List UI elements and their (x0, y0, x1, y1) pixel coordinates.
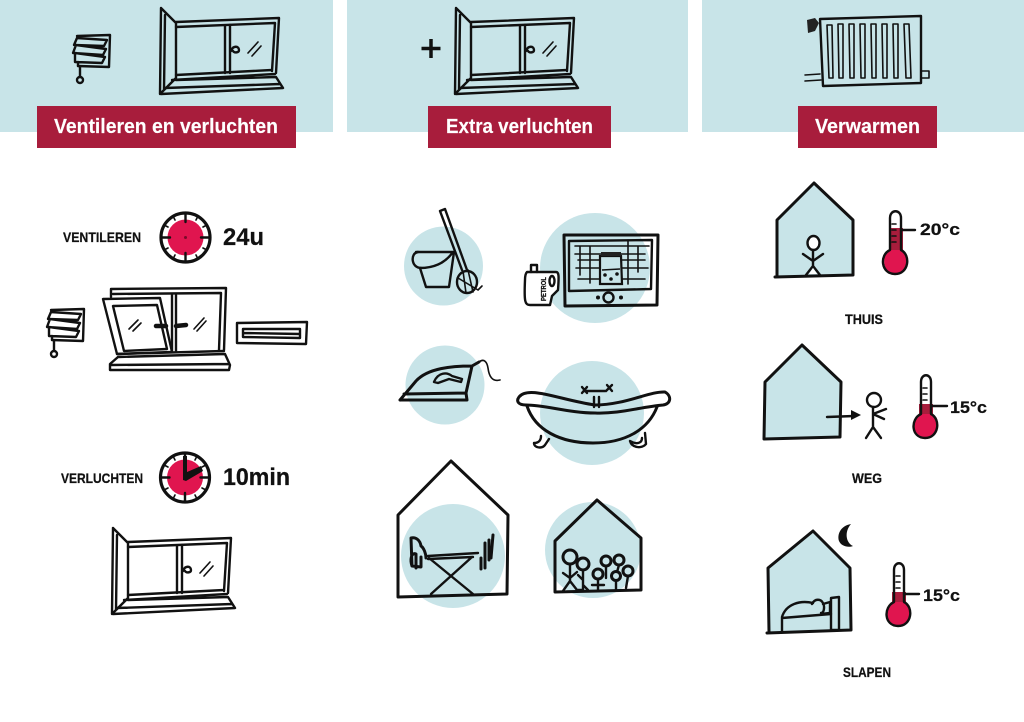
icon: plus sign (422, 39, 440, 58)
icon: thermometer 15 degrees (887, 563, 919, 626)
block: thuis (775, 183, 960, 327)
heading: verwarmen: Verwarmen (815, 116, 920, 138)
panel: ventileren en verluchten header (0, 0, 333, 148)
label: verluchten: VERLUCHTEN (61, 470, 143, 486)
icon: wall vent (73, 35, 110, 83)
value: 15 degrees: 15°c (950, 398, 987, 417)
label: weg: WEG (852, 470, 882, 486)
icon: house with person (775, 183, 853, 277)
heading: extra verluchten (428, 106, 611, 148)
value: 10min: 10min (223, 464, 290, 491)
heading: ventileren en verluchten: Ventileren en verluchten (54, 116, 278, 138)
label: slapen: SLAPEN (843, 664, 891, 680)
heading: verwarmen (798, 106, 937, 148)
block: verluchten 10 minuten (61, 453, 290, 502)
illustration: plants in house (545, 500, 641, 598)
illustration: bathtub (518, 361, 670, 465)
icon: tilted open window (103, 288, 230, 370)
heading: extra verluchten: Extra verluchten (446, 116, 593, 138)
value: 20 degrees: 20°c (920, 220, 960, 239)
block: weg (764, 345, 987, 486)
block: ventileren 24 uur (63, 213, 264, 262)
icon: house with person leaving (764, 345, 886, 439)
illustration: drying rack in house (398, 461, 508, 608)
icon: open window (455, 8, 578, 94)
petrol can: PETROL (539, 277, 548, 301)
icon: open window (160, 8, 283, 94)
icon: open window (112, 528, 235, 614)
label: ventileren: VENTILEREN (63, 229, 141, 245)
icon: thermometer 20 degrees (883, 211, 915, 274)
icon: wall vent (47, 309, 84, 357)
icon: clock full red (161, 213, 210, 262)
panel: verwarmen header (702, 0, 1024, 148)
icon: radiator (805, 16, 929, 86)
value: 15 degrees: 15°c (923, 586, 960, 605)
illustration: iron (400, 346, 500, 424)
icon: house with bed (767, 531, 851, 633)
block: slapen (767, 524, 960, 680)
illustration: oven and petrol can (525, 213, 658, 323)
icon: moon (838, 524, 853, 547)
icon: trickle vent (237, 322, 307, 344)
illustration: bucket and mop (404, 209, 483, 306)
heading: ventileren en verluchten (37, 106, 296, 148)
icon: thermometer 15 degrees (914, 375, 947, 438)
panel: extra verluchten header (347, 0, 688, 148)
label: thuis: THUIS (845, 311, 883, 327)
icon: clock with ten minutes (160, 453, 210, 502)
value: 24u: 24u (223, 224, 264, 251)
